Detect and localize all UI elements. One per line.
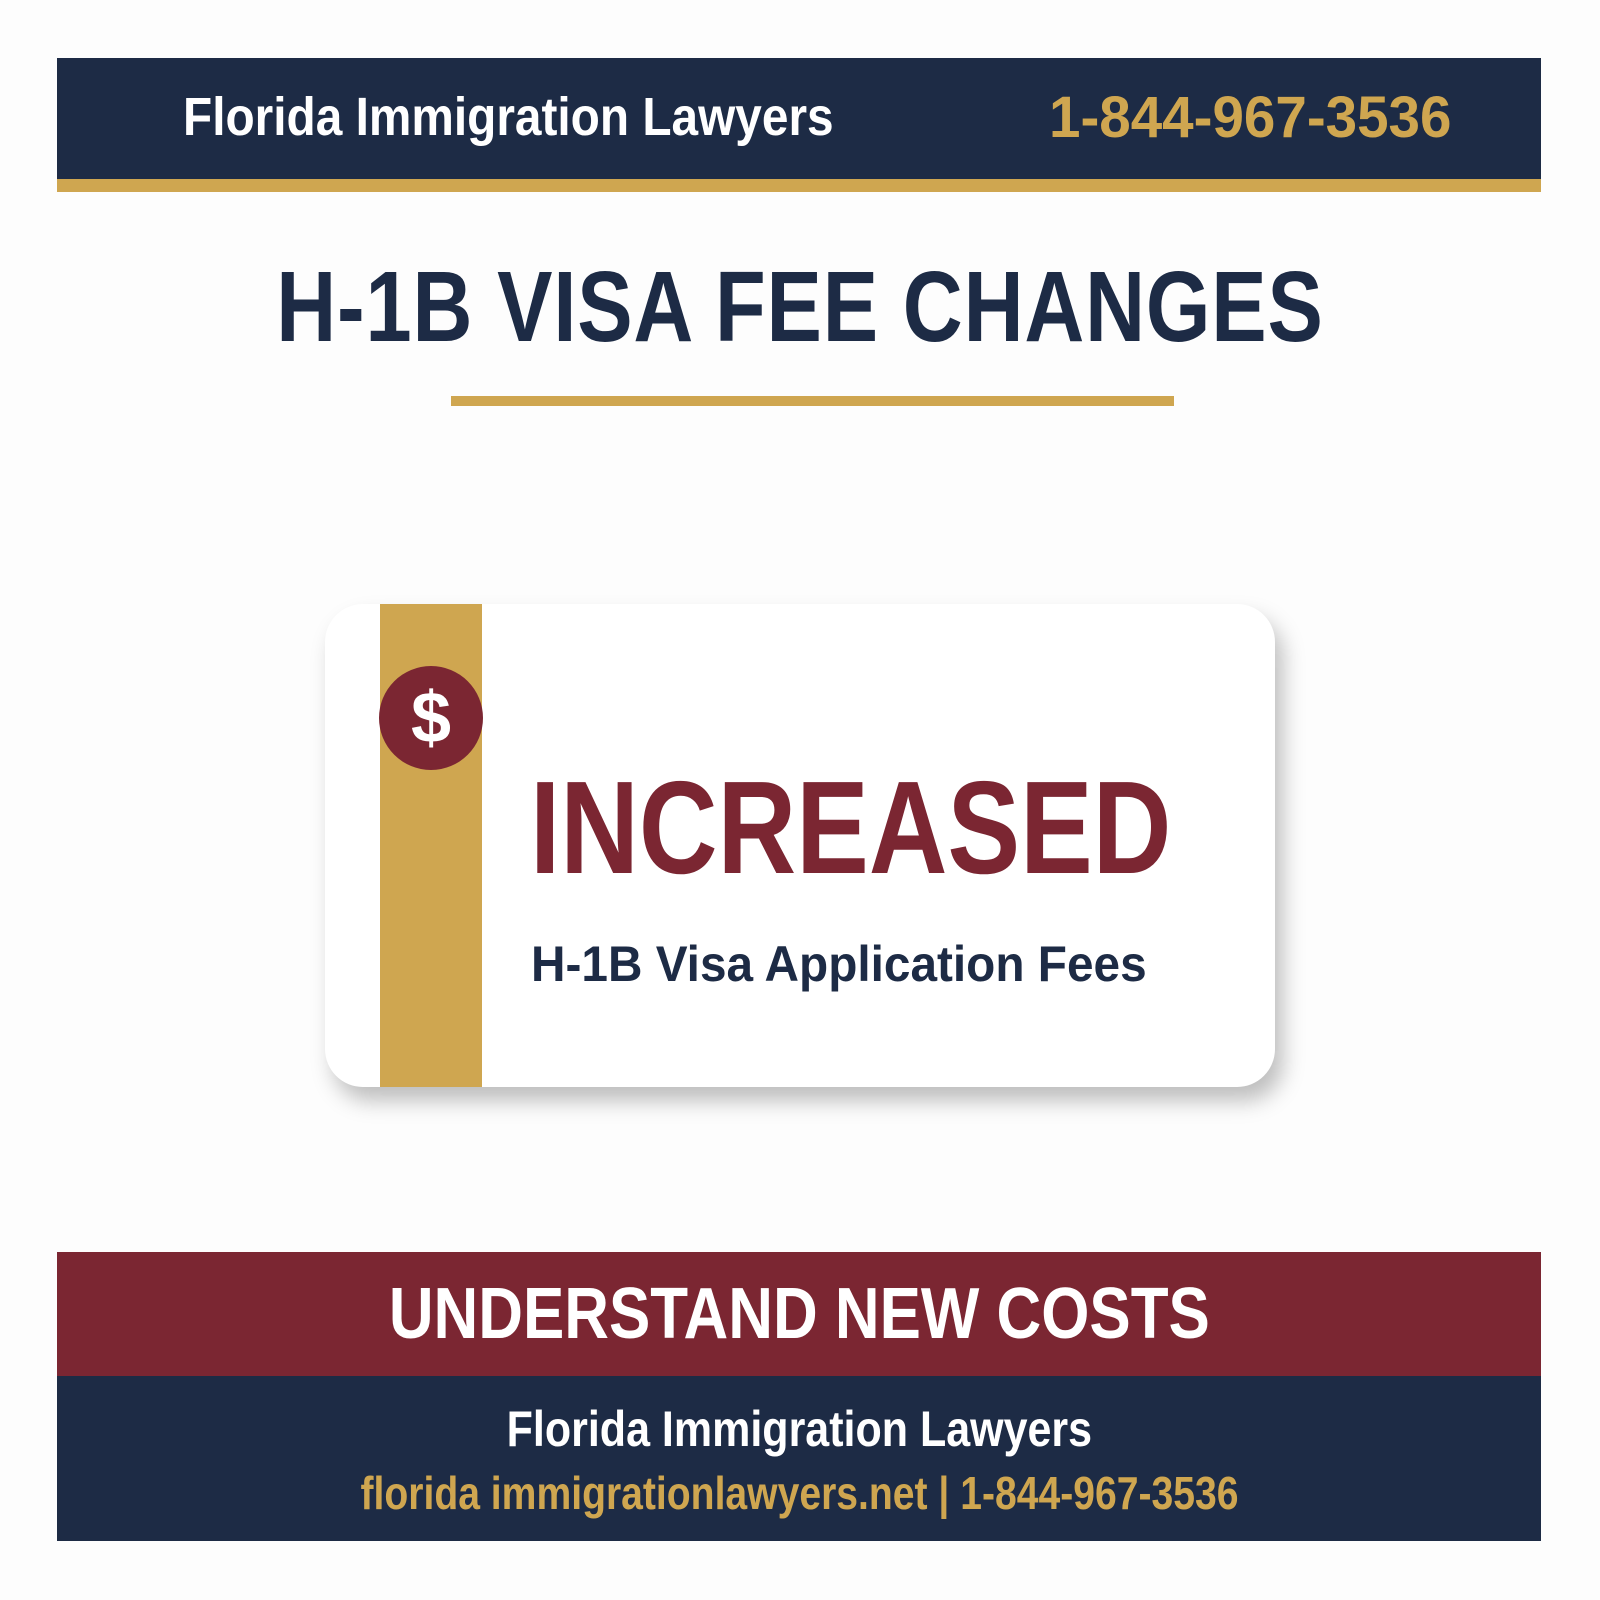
title underline (451, 396, 1174, 406)
title: H-1B VISA FEE CHANGES (276, 251, 1324, 363)
header firm name: Florida Immigration Lawyers (183, 87, 834, 147)
footer contact: florida immigrationlawyers.net | 1-844-967-3536 (360, 1467, 1238, 1519)
header phone: 1-844-967-3536 (1049, 85, 1451, 150)
card subtitle: H-1B Visa Application Fees (531, 936, 1147, 992)
card gold stripe (380, 604, 482, 1087)
footer red banner (57, 1252, 1541, 1376)
icon: dollar circle: $ (411, 678, 451, 758)
footer navy panel (57, 1376, 1541, 1541)
INCREASED: INCREASED (530, 754, 1171, 901)
card (325, 604, 1275, 1087)
header bar (57, 58, 1541, 192)
footer firm name: Florida Immigration Lawyers (506, 1401, 1092, 1457)
icon: dollar circle (379, 666, 483, 770)
footer red banner: UNDERSTAND NEW COSTS (388, 1274, 1210, 1354)
